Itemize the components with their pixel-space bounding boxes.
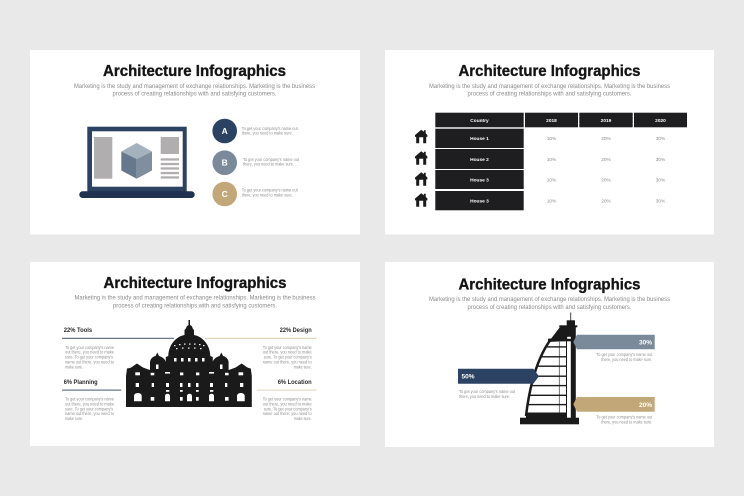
option B: there, you need to make sure.	[243, 162, 294, 167]
subtitle: Marketing is the study and management of exchange relationships. Marketing is the business	[74, 83, 315, 90]
subtitle: process of creating relationships with and satisfying customers.	[112, 90, 277, 98]
table row: House 3: 30%	[656, 178, 666, 184]
table row: House 2: 30%	[656, 157, 666, 163]
icon: house 2	[415, 151, 427, 165]
callout: 30%: To get your company's name out	[596, 352, 653, 357]
option A: there, you need to make sure.	[242, 131, 293, 136]
table row: House 3 repeated: 10%	[547, 198, 557, 204]
item: 6% Location	[257, 379, 317, 421]
table row: House 3 repeated: 30%	[656, 198, 666, 204]
callout: 50%: there, you need to make sure.	[459, 394, 510, 399]
item: 6% Planning: name out there, you need to	[65, 411, 115, 416]
title: Architecture Infographics	[458, 276, 640, 294]
item: 6% Location: 6% Location	[278, 379, 312, 386]
item: 6% Planning: out there, you need to make	[65, 401, 115, 406]
table row: House 3: 10%	[547, 178, 557, 184]
callout: 20%: 20%	[639, 402, 652, 409]
icon: house 1	[415, 130, 427, 143]
subtitle	[429, 296, 670, 311]
item: 22% Tools: name out there, you need to	[65, 360, 115, 364]
subtitle	[74, 295, 316, 309]
table row: House 1: 20%	[601, 136, 612, 142]
table header	[435, 113, 687, 127]
table row: House 1: House 1	[470, 136, 489, 142]
item: 6% Planning: 6% Planning	[64, 379, 98, 386]
table row: House 1	[435, 129, 666, 148]
subtitle: Marketing is the study and management of exchange relationships. Marketing is the business	[74, 295, 316, 302]
option C: there, you need to make sure.	[242, 192, 293, 197]
table row: House 2: 10%	[547, 157, 557, 163]
item: 22% Design: To get your company's name	[263, 345, 312, 350]
icon: domed cathedral silhouette	[126, 320, 252, 407]
item: 22% Tools: 22% Tools	[64, 327, 93, 334]
subtitle: Marketing is the study and management of exchange relationships. Marketing is the business	[429, 83, 670, 90]
item: 22% Design: make sure.	[294, 364, 312, 369]
table row: House 3 repeated: House 3	[470, 198, 489, 204]
panel: tower slide	[385, 262, 714, 447]
table row: House 3 repeated	[435, 191, 666, 210]
table header: 2020	[655, 118, 666, 124]
option A: To get your company's name out	[242, 126, 299, 131]
item: 22% Tools	[62, 327, 174, 369]
subtitle	[74, 83, 315, 98]
callout: 30%: there, you need to make sure.	[601, 357, 652, 362]
option C: C	[222, 189, 228, 199]
panel: table slide	[385, 50, 714, 234]
callout: 30%	[573, 335, 655, 362]
option B: B	[222, 158, 228, 168]
subtitle: process of creating relationships with and satisfying customers.	[113, 302, 277, 309]
item: 6% Location: out there, you need to make	[263, 401, 312, 406]
subtitle: Marketing is the study and management of exchange relationships. Marketing is the business	[429, 296, 670, 303]
icon: laptop with cube	[79, 127, 195, 198]
table row: House 3: House 3	[470, 178, 489, 184]
item: 22% Design	[205, 327, 317, 369]
callout: 50%: 50%	[462, 374, 475, 380]
item: 22% Design: name out there, you need to	[263, 360, 312, 364]
item: 6% Planning	[62, 379, 121, 421]
icon: house 3	[415, 172, 427, 186]
title: Architecture Infographics	[103, 63, 286, 80]
panel: laptop slide	[30, 50, 360, 234]
subtitle	[429, 83, 670, 98]
panel: cathedral slide	[30, 262, 360, 446]
item: 22% Design: 22% Design	[280, 327, 312, 334]
table header: 2019	[601, 118, 612, 124]
callout: 50%: To get your company's name out	[459, 389, 516, 394]
item: 6% Planning: make sure.	[65, 416, 83, 421]
table header: 2018	[546, 118, 557, 124]
subtitle: process of creating relationships with and satisfying customers.	[468, 90, 632, 98]
table row: House 1: 10%	[547, 136, 557, 142]
table row: House 3	[435, 170, 666, 189]
title: Architecture Infographics	[104, 275, 286, 292]
item: 6% Location: To get your company's name	[263, 396, 312, 402]
table header: Country	[470, 118, 489, 124]
item: 22% Tools: make sure.	[65, 364, 83, 369]
table row: House 1: 30%	[656, 136, 666, 142]
item: 22% Design: out there, you need to make	[263, 350, 312, 355]
item: 22% Tools: To get your company's name	[65, 345, 115, 350]
callout: 20%: there, you need to make sure.	[601, 420, 652, 424]
item: 6% Location: sure. To get your company's	[264, 406, 312, 411]
table row: House 2: House 2	[470, 157, 489, 163]
option A	[212, 119, 299, 143]
option B: To get your company's name out	[243, 157, 300, 162]
table row: House 3 repeated: 20%	[601, 198, 612, 204]
callout: 20%: To get your company's name out	[596, 414, 653, 420]
table row: House 3: 20%	[601, 178, 612, 184]
option C: To get your company's name out	[242, 188, 299, 192]
item: 22% Tools: sure. To get your company's	[65, 355, 113, 360]
item: 6% Location: make sure.	[294, 416, 312, 421]
table row: House 2: 20%	[601, 157, 612, 163]
item: 6% Planning: sure. To get your company's	[65, 406, 113, 411]
icon: sail-shaped tower	[520, 312, 579, 424]
title: Architecture Infographics	[458, 63, 640, 80]
callout: 20%	[573, 397, 655, 424]
item: 6% Location: name out there, you need to	[263, 411, 312, 416]
option A: A	[222, 126, 228, 136]
option C	[212, 182, 299, 206]
table row: House 2	[435, 149, 666, 169]
icon: house 4	[415, 193, 427, 207]
option B	[212, 150, 300, 175]
item: 6% Planning: To get your company's name	[65, 396, 115, 402]
item: 22% Design: sure. To get your company's	[264, 355, 312, 360]
callout: 30%: 30%	[639, 340, 652, 346]
item: 22% Tools: out there, you need to make	[65, 350, 115, 355]
callout: 50%	[458, 369, 539, 399]
subtitle: process of creating relationships with and satisfying customers.	[468, 304, 632, 311]
